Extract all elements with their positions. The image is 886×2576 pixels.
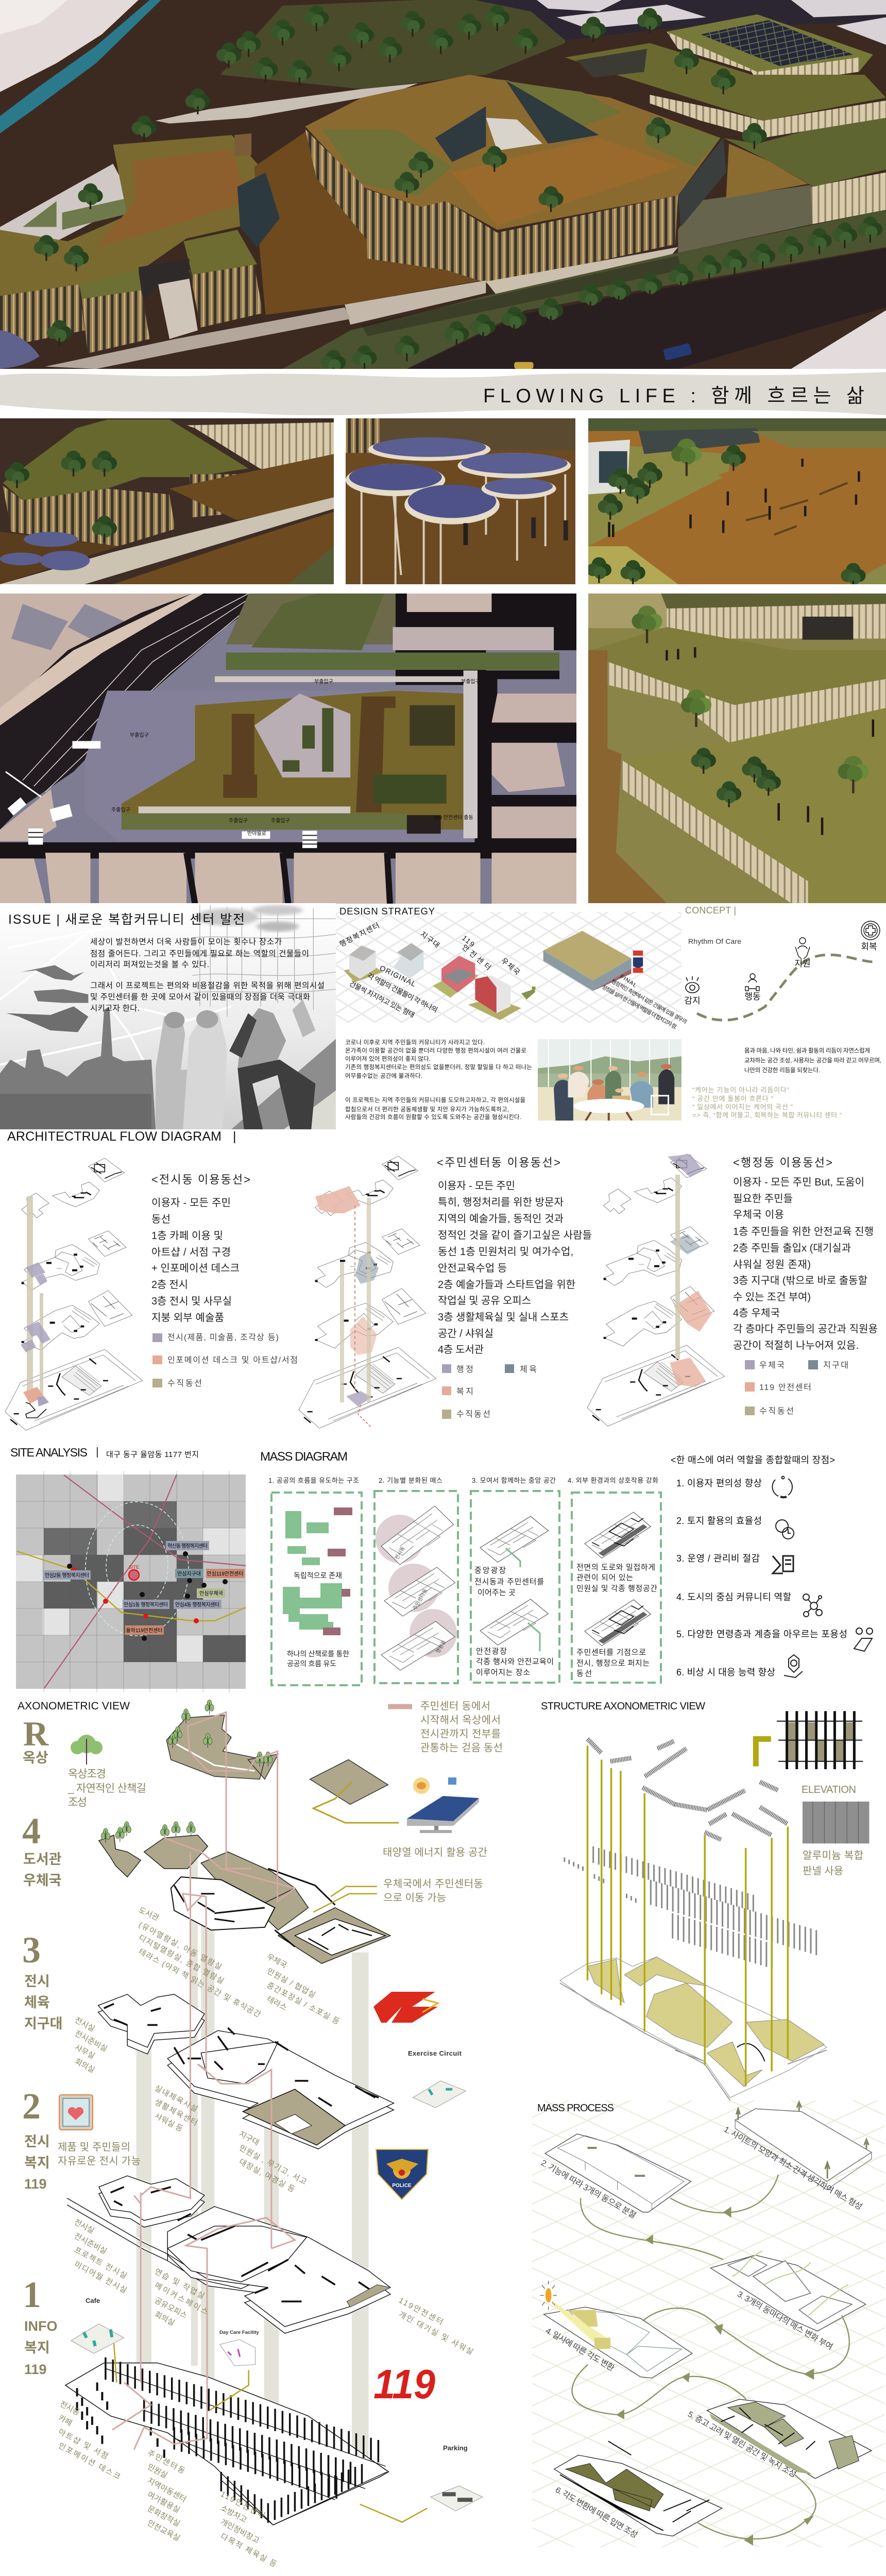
level labels: 119 <box>24 2362 47 2377</box>
strategy paragraphs <box>345 1039 532 1121</box>
concept quotes: “ 공간 안에 돌봄이 흐른다 ” <box>692 1095 773 1103</box>
flow 3 legend: 지구대 <box>823 1361 848 1370</box>
mass 4: environment: 관련이 되어 있는 <box>576 1573 633 1582</box>
walkway legend: 주민센터 동에서 <box>420 1700 490 1712</box>
rotated programme labels: 민원실 <box>146 2463 169 2480</box>
concept quotes: “ 일상에서 이어지는 케어의 곡선 ” <box>692 1103 793 1111</box>
level labels: 우체국 <box>23 1873 62 1888</box>
rotated programme labels: 도서관 <box>137 1906 160 1923</box>
panel: flow 2 residents centre: <주민센터동 이용동선> <box>437 1156 560 1169</box>
level labels: 1 <box>23 2274 41 2315</box>
icon: recovery 회복: 회복 <box>861 942 877 952</box>
panel: merits list: 2. 토지 활용의 효율성 <box>676 1516 762 1526</box>
strategy labels rotated: 행정적인 측면에서 같은 건물에 있을 경우의 <box>610 978 688 1025</box>
hero render: aerial view of the green-roof community centre <box>0 0 886 369</box>
facility labels: Cafe <box>86 2297 100 2304</box>
site map: 안심2동 행정복지센터 <box>45 1572 89 1579</box>
rotated programme labels: 주민센터동 <box>146 2449 186 2476</box>
site analysis heading: SITE ANALYSIS <box>10 1446 88 1459</box>
issue paragraph: 세상이 발전하면서 더욱 사람들이 모이는 횟수나 장소가 <box>90 937 282 946</box>
floor plan stack 2 <box>299 1156 436 1428</box>
panel: design strategy <box>336 906 688 1121</box>
strategy paragraphs: 이 프로젝트는 지역 주민들의 커뮤니티를 도모하고자하고, 각 편의시설을 <box>345 1096 525 1104</box>
strategy labels rotated: ORIGINAL <box>379 963 417 988</box>
panel: mass process <box>532 2100 885 2547</box>
site map: 안심1동 행정복지센터 <box>124 1602 168 1608</box>
photo: roof garden and people <box>588 594 886 903</box>
concept text: 나만의 건강한 리듬을 되찾는다. <box>744 1067 820 1074</box>
structure drawing <box>559 1711 870 2100</box>
level labels: 전시 <box>24 2134 50 2149</box>
title band with hand-torn wave <box>0 369 886 418</box>
site map: 안심우체국 <box>199 1590 223 1597</box>
rotated programme labels: 회의실 <box>153 2310 176 2328</box>
panel: structure axonometric: STRUCTURE AXONOMETRIC VIEW <box>541 1701 705 1712</box>
flow 3 text: 필요한 주민들 <box>733 1193 793 1205</box>
flow 3 text: 2층 주민들 출입x (대기실과 <box>733 1242 851 1254</box>
level labels: 도서관 <box>23 1852 62 1867</box>
elevation material note: 판넬 사용 <box>803 1865 843 1877</box>
elevation material note: ELEVATION <box>802 1784 856 1795</box>
flow 2 legend: 체육 <box>520 1365 537 1374</box>
concept quotes: “케어는 기능이 아니라 리듬이다” <box>692 1086 789 1094</box>
flow 1 text: 이용자 - 모든 주민 <box>151 1197 231 1209</box>
rotated programme labels: 우체국 <box>265 1953 288 1970</box>
rooftop annotation: _ 자연적인 산책길 <box>67 1783 146 1794</box>
site plan labels: 주출입구 <box>111 806 130 813</box>
facility labels: Parking <box>443 2444 468 2452</box>
mass 4: environment: 동선 <box>576 1669 592 1678</box>
icon: solar panel <box>407 1777 479 1833</box>
flow 2 legend <box>442 1364 537 1419</box>
mass 2: functional masses: 주민센터동 <box>412 1588 429 1612</box>
level labels: 옥상 <box>23 1750 48 1766</box>
flow 2 text <box>438 1180 592 1355</box>
strategy paragraphs: 사람들의 건강의 흐름이 원활할 수 있도록 도와주는 공간을 형성시킨다. <box>345 1113 521 1121</box>
annotation: solar and post office <box>58 1846 487 2167</box>
site map: 안심119안전센터 <box>207 1571 244 1577</box>
rotated programme labels: 개인 대기실 및 샤워실 <box>397 2310 474 2357</box>
concept text: 교차하는 공간 조성, 사용자는 공간을 따라 걷고 머무르며, <box>744 1057 881 1064</box>
flow 1 text: 동선 <box>151 1213 171 1225</box>
rotated programme labels: 지구대 <box>237 2130 261 2147</box>
strategy labels rotated: 장점을 살려 한 건물에 역할을 더 합치고자 함. <box>601 984 678 1031</box>
flow 2 text: 공간 / 샤워실 <box>438 1328 493 1340</box>
strategy paragraphs: 코로나 이후로 지역 주민들의 커뮤니티가 사라지고 있다. <box>345 1039 485 1046</box>
panel: mass diagram: 1. 공공의 흐름을 유도하는 구조 <box>268 1477 359 1484</box>
rotated programme labels: 연습 및 작업실 <box>153 2267 206 2301</box>
panel: merits list: 1. 이용자 편의성 향상 <box>676 1478 762 1488</box>
panel: site analysis <box>10 1446 246 1692</box>
mass 4: environment: 전면의 도로와 밀접하게 <box>576 1563 655 1572</box>
heading: architectural flow diagram: ARCHITECTRUAL FLOW DIAGRAM <box>7 1129 222 1144</box>
flow 3 text <box>733 1176 878 1351</box>
level labels: 4 <box>22 1810 41 1852</box>
flow 3 legend: 우체국 <box>759 1361 785 1370</box>
rooftop annotation <box>67 1768 146 1808</box>
annotation: solar and post office: 우체국에서 주민센터동 <box>383 1878 483 1890</box>
issue paragraph: 및 주민센터를 한 곳에 모아서 같이 있을때의 장점을 더욱 극대화 <box>90 992 310 1002</box>
site plan labels: 부출입구 <box>130 732 149 738</box>
walkway legend: 전시관까지 전부를 <box>420 1728 501 1740</box>
design strategy heading: DESIGN STRATEGY <box>339 906 435 917</box>
panel: merits list: 3. 운영 / 관리비 절감 <box>676 1553 760 1564</box>
level labels <box>22 1714 63 2377</box>
rotated programme labels: 전시실 <box>73 2016 96 2033</box>
flow 1 legend: 전시(제품, 미술품, 조각상 등) <box>167 1333 279 1342</box>
issue paragraph <box>90 937 325 1013</box>
strategy labels rotated <box>338 921 688 1031</box>
mass 3: central space: 전시동과 주민센터를 <box>474 1578 544 1586</box>
issue heading: ISSUE | 새로운 복합커뮤니티 센터 발전 <box>8 912 245 927</box>
level labels: 전시 <box>24 1974 50 1989</box>
level labels: 복지 <box>24 2340 50 2355</box>
icon: eye 감지 <box>684 976 701 1006</box>
icon: action 행동 <box>744 974 761 1002</box>
rotated programme labels: 디지털열람실, 종합 열람실 <box>137 1934 225 1986</box>
mass process captions <box>539 2125 864 2540</box>
mass 3: central space <box>474 1516 554 1677</box>
panel: mass diagram: 2. 기능별 분화된 매스 <box>379 1477 442 1484</box>
concept quotes <box>692 1086 842 1119</box>
site map: 혁신동 행정복지센터 <box>167 1543 208 1549</box>
flow 3 text: 1층 주민들을 위한 안전교육 진행 <box>733 1226 874 1238</box>
site map: 율하119안전센터 <box>126 1627 163 1634</box>
rotated programme labels: 전시준비실 <box>73 2232 108 2256</box>
flow 1 text: + 인포메이션 데스크 <box>151 1262 240 1274</box>
mass 2: functional masses: 행정동 <box>435 1639 447 1655</box>
mass 3: central space: 이어주는 곳 <box>478 1588 516 1597</box>
issue paragraph: 그래서 이 프로젝트는 편의와 비용절감을 위한 목적을 위해 편의시설 <box>90 981 325 990</box>
rotated programme labels: 민원실 / 협업실 <box>265 1967 317 1999</box>
panel: structure axonometric <box>541 1701 869 2100</box>
mass 4: environment <box>576 1512 657 1678</box>
walkway legend: 시작해서 옥상에서 <box>420 1714 501 1726</box>
strategy paragraphs: 온가족이 이용할 공간이 없을 뿐더러 다양한 행정 편의시설이 여러 건물로 <box>345 1047 526 1054</box>
flow 2 text: 4층 도서관 <box>438 1344 484 1355</box>
rotated programme labels: 119안전센터 <box>219 2490 266 2520</box>
rotated programme labels: 샤워실 등 <box>153 2112 184 2133</box>
mass 3: central space: 안전광장 <box>476 1647 507 1656</box>
rotated programme labels: 인포메이션 데스크 <box>57 2442 122 2481</box>
strategy labels rotated: 각 역할의 건물들이 각 하나의 <box>366 972 439 1014</box>
flow 2 text: 이용자 - 모든 주민 <box>438 1180 515 1192</box>
rotated programme labels: 메이커스페이스 <box>153 2281 210 2317</box>
mass process steps <box>540 2100 873 2546</box>
flow 3 text: 이용자 - 모든 주민 But, 도움이 <box>733 1176 864 1188</box>
flow 1 text: 1층 카페 이용 및 <box>151 1230 223 1242</box>
photo: building bridge perspective <box>0 418 334 584</box>
flow 2 legend: 행정 <box>456 1365 473 1374</box>
panel: merits list <box>671 1455 873 1677</box>
concept quotes: => 즉, “함께 머물고, 회복하는 복합 커뮤니티 센터 ” <box>692 1111 842 1119</box>
site plan labels <box>78 678 480 837</box>
flow 3 text: 공간이 적절히 나누어져 있음. <box>733 1340 859 1351</box>
panel: merits list: 6. 비상 시 대응 능력 향상 <box>676 1667 775 1677</box>
strategy paragraphs: 합침으로서 더 편리한 공동체생활 및 치안 유지가 가능하도록하고, <box>345 1106 509 1113</box>
mass process captions: 5. 층고 고려 및 열린 공간 및 녹지 조성 <box>686 2410 798 2479</box>
mass 1: separate blocks: 공공의 흐름 유도 <box>287 1659 336 1668</box>
flow 3 text: 샤워실 정원 존재) <box>733 1259 811 1270</box>
rotated programme labels: 회의실 <box>73 2057 96 2075</box>
panel: merits list: 5. 다양한 연령층과 계층을 아우르는 포용성 <box>676 1629 847 1639</box>
panel: mass process: MASS PROCESS <box>537 2103 614 2114</box>
logo: police badge <box>376 2149 428 2199</box>
site plan with road labels <box>0 594 576 904</box>
facility labels: Day Care Facility <box>219 2330 259 2335</box>
site plan labels: 범안로 <box>78 731 93 737</box>
level labels: INFO <box>24 2318 58 2334</box>
concept text <box>744 1047 881 1074</box>
rotated programme labels: 프로젝트 전시실 <box>73 2246 128 2281</box>
flow 2 text: 3층 생활체육실 및 실내 스포츠 <box>438 1311 569 1323</box>
mass 1: separate blocks <box>283 1507 352 1668</box>
flow 2 text: 안전교육수업 등 <box>438 1262 507 1274</box>
rotated programme labels: 안전교육실 <box>146 2519 181 2543</box>
site plan labels: 부출입구 <box>314 678 333 685</box>
strategy labels rotated: 지구대 <box>419 930 441 950</box>
isometric buildings and final mass <box>344 930 643 1020</box>
level labels: 복지 <box>24 2155 50 2171</box>
site map: 안심4동 행정복지센터 <box>175 1602 219 1608</box>
annotation: solar and post office: 으로 이동 가능 <box>383 1892 446 1904</box>
level labels: 3 <box>22 1929 41 1971</box>
panel: mass diagram: 4. 외부 환경과의 상호작용 강화 <box>568 1477 658 1484</box>
site analysis heading: 대구 동구 율암동 1177 번지 <box>106 1450 199 1459</box>
strategy labels rotated: 우체국 <box>500 956 522 976</box>
rotated programme labels: 중간포장실 / 소포실 등 <box>265 1981 341 2026</box>
rotated programme labels: 다목적 체육실 등 <box>219 2532 278 2569</box>
mass 4: environment: 전시, 행정으로 퍼지는 <box>576 1659 650 1668</box>
panel: issue <box>0 903 336 1129</box>
annotation: solar and post office: 태양열 에너지 활용 공간 <box>383 1846 487 1858</box>
concept heading: CONCEPT | <box>685 905 736 916</box>
site plan labels: 주출입구 <box>229 817 248 824</box>
flow 2 text: 2층 예술가들과 스타트업을 위한 <box>438 1279 575 1291</box>
panel: concept: Rhythm Of Care <box>688 937 741 945</box>
icon: action 행동: 행동 <box>744 992 761 1002</box>
elevation material note: 알루미늄 복합 <box>803 1850 863 1861</box>
strategy labels rotated: 안전센터 <box>461 943 492 972</box>
heading: architectural flow diagram: | <box>233 1129 236 1144</box>
panel: axonometric view: AXONOMETRIC VIEW <box>18 1700 130 1712</box>
panel: flow 3 administration <box>587 1154 878 1426</box>
site plan labels: 반야월로 <box>247 831 266 837</box>
illustration: people around a table <box>538 1039 681 1121</box>
mass 2: functional masses <box>376 1506 457 1670</box>
photo: blue pavilion canopies <box>346 418 575 584</box>
icon: support 지원: 지원 <box>794 959 811 969</box>
mass process captions: 3. 3개의 동마다의 매스 변화 부여 <box>736 2290 834 2352</box>
icon: exhibition frame <box>59 2095 93 2130</box>
mass process captions: 2. 기능에 따라 3개의 동으로 분절 <box>539 2158 638 2220</box>
panel: flow 3 administration: <행정동 이용동선> <box>733 1156 832 1169</box>
panel: flow 2 residents centre <box>299 1156 592 1428</box>
icon: recovery 회복 <box>861 921 880 952</box>
panel: merits list: 4. 도시의 중심 커뮤니티 역할 <box>676 1592 791 1602</box>
strategy paragraphs: 이루어져 있어 편의성이 좋지 않다. <box>345 1056 431 1062</box>
rotated programme labels: 개인정비창고 <box>219 2518 261 2545</box>
facility labels <box>86 2049 468 2452</box>
mass 2: functional masses: 전시동 <box>394 1546 406 1561</box>
logo: police badge: POLICE <box>392 2183 412 2189</box>
mass 4: environment: 민원실 및 각종 행정공간 <box>576 1584 657 1593</box>
mass process captions: 4. 일사에 따른 각도 변환 <box>544 2326 616 2373</box>
strategy paragraphs: 머무를수없는 공간에 불과하다. <box>345 1072 422 1079</box>
annotation: solar and post office: 제품 및 주민들의 <box>58 2141 130 2153</box>
mass 3: central space: 중앙광장 <box>474 1566 506 1575</box>
rotated programme labels: 여가활용실 <box>146 2490 181 2515</box>
concept text: 몸과 마음, 나와 타인, 쉼과 활동의 리듬이 자연스럽게 <box>744 1047 870 1054</box>
panel: mass diagram <box>260 1450 661 1685</box>
site map: SITE <box>129 1565 139 1570</box>
icon: rooftop tree <box>71 1735 103 1765</box>
mass 1: separate blocks: 독립적으로 존재 <box>294 1571 342 1580</box>
walkway legend <box>420 1700 503 1754</box>
panel: mass diagram: MASS DIAGRAM <box>260 1450 348 1464</box>
rotated programme labels: 문화창작실 <box>146 2504 181 2529</box>
walkway legend: 관통하는 걷음 동선 <box>420 1742 503 1754</box>
facility labels: Exercise Circuit <box>408 2049 462 2057</box>
rotated programme labels: (유아열람실, 아동 열람실 <box>137 1921 223 1972</box>
icon: support 지원 <box>794 938 811 969</box>
title band with hand-torn wave: FLOWING LIFE : 함께 흐르는 삶 <box>483 385 864 407</box>
floor plan stack 1 <box>5 1158 143 1430</box>
flow 1 text: 아트샵 / 서점 구경 <box>151 1246 231 1258</box>
site map <box>16 1471 246 1692</box>
rotated programme labels: 공유오피스 <box>153 2296 189 2320</box>
flow 2 text: 정적인 것을 같이 즐기고싶은 사람들 <box>438 1229 592 1241</box>
strategy paragraphs: 기존의 행정복지센터로는 편의성도 없을뿐더러, 정말 할일을 다 하고 떠나는 <box>345 1063 532 1071</box>
flow 3 text: 수 있는 조건 부여) <box>733 1291 811 1303</box>
flow 3 text: 4층 우체국 <box>733 1307 780 1319</box>
panel: concept <box>684 905 881 1119</box>
flow 3 text: 3층 지구대 (밖으로 바로 출동할 <box>733 1275 867 1286</box>
panel: flow 1 exhibition: <전시동 이용동선> <box>151 1173 250 1186</box>
rotated programme labels: 119안전센터 <box>397 2296 445 2327</box>
flow 1 text <box>151 1197 240 1324</box>
site plan labels: 119 안전센터 출동 <box>434 815 473 821</box>
issue paragraph: 시키고자 한다. <box>90 1004 140 1013</box>
rotated programme labels: 전시준비실 <box>73 2029 109 2054</box>
rooftop annotation: 옥상조경 <box>68 1768 106 1780</box>
rotated programme labels: 민원실 , 무기고, 서고 <box>237 2144 308 2187</box>
flow 2 text: 작업실 및 공유 오피스 <box>438 1295 531 1307</box>
photo: timber plaza with lawn and people <box>588 418 886 584</box>
rotated programme labels: 생활체육센터 <box>153 2098 199 2128</box>
rotated programme labels: 테라스 <box>265 1995 288 2012</box>
mass process captions: 6. 각도 변환에 따른 입면 조성 <box>554 2485 639 2540</box>
flow 1 text: 2층 전시 <box>151 1279 188 1291</box>
flow 2 legend: 수직동선 <box>456 1410 490 1419</box>
mass 3: central space: 각종 행사와 안전교육이 <box>476 1657 554 1666</box>
strategy labels rotated: 119 <box>461 934 476 948</box>
flow 2 text: 지역의 예술가들, 동적인 것과 <box>438 1213 564 1225</box>
flow 1 text: 지붕 외부 예술품 <box>151 1312 224 1324</box>
panel: flow 1 exhibition <box>5 1158 298 1430</box>
level labels: 119 <box>24 2176 47 2192</box>
logo: 119: 119 <box>373 2361 435 2407</box>
dashed rhythm curve <box>697 955 873 1020</box>
floor plan stack 3 <box>587 1154 725 1426</box>
strategy labels rotated: 건물씩 차지하고 있는 형태 <box>348 979 416 1019</box>
strategy labels rotated: 행정복지센터 <box>338 921 381 948</box>
site plan labels: 주출입구 <box>271 817 290 824</box>
flow 3 text: 우체국 이용 <box>733 1209 784 1221</box>
flow 2 text: 특히, 행정처리를 위한 방문자 <box>438 1196 564 1208</box>
flow 3 legend <box>745 1360 848 1416</box>
level labels: 2 <box>22 2086 41 2127</box>
rotated programme labels: 카페 <box>57 2414 73 2428</box>
level labels: 지구대 <box>24 2016 63 2031</box>
flow 1 legend <box>152 1333 298 1388</box>
rooftop annotation: 조성 <box>68 1797 87 1808</box>
flow 2 text: 동선 1층 민원처리 및 여가수업, <box>438 1246 573 1258</box>
logo: post office <box>373 1992 438 2023</box>
elevation material note <box>802 1784 863 1877</box>
issue paragraph: 점점 줄어든다. 그리고 주민들에게 필요로 하는 역할의 건물들이 <box>90 949 309 958</box>
rotated programme labels: 전시동 <box>58 2400 81 2417</box>
icon: eye 감지: 감지 <box>684 996 701 1006</box>
rotated programme labels: 지역아동센터 <box>146 2477 188 2504</box>
mass 3: central space: 이루어지는 장소 <box>476 1668 530 1677</box>
icon: sun <box>413 1777 430 1794</box>
level labels: 체육 <box>24 1995 50 2010</box>
site plan labels: 부출입구 <box>461 678 480 685</box>
flow 3 text: 각 층마다 주민들의 공간과 직원용 <box>733 1323 878 1335</box>
annotation: solar and post office: 자유로운 전시 가능 <box>58 2155 141 2167</box>
rotated programme labels: 소방차고 <box>219 2504 248 2524</box>
panel: axonometric view <box>18 1700 503 2569</box>
panel: mass diagram: 3. 모여서 함께하는 중앙 공간 <box>472 1477 556 1484</box>
rotated programme labels: 사무실 <box>73 2043 96 2061</box>
rotated programme labels <box>57 1906 474 2569</box>
level labels: R <box>23 1714 49 1753</box>
flow 1 legend: 수직동선 <box>167 1379 202 1388</box>
flow 1 legend: 인포메이션 데스크 및 아트샵/서점 <box>167 1355 298 1365</box>
rotated programme labels: 아트샵 및 서점 <box>57 2428 110 2461</box>
flow 3 legend: 수직동선 <box>759 1406 794 1416</box>
mass 4: environment: 주민센터를 기점으로 <box>576 1648 646 1657</box>
rotated programme labels: 테라스 (야외 책 읽는 공간 및 휴식공간 <box>137 1947 262 2019</box>
rotated programme labels: 대장실, 여경실 등 <box>237 2158 296 2194</box>
panel: merits list: <한 매스에 여러 역할을 종합할때의 장점> <box>671 1455 835 1465</box>
flow 3 legend: 119 안전센터 <box>759 1383 811 1392</box>
site analysis heading <box>10 1446 199 1459</box>
site map: 안심지구대 <box>177 1571 201 1577</box>
rotated programme labels: 전시실 <box>73 2218 96 2235</box>
dashed frames <box>271 1491 661 1685</box>
exploded axonometric drawing <box>65 1700 483 2526</box>
flow 2 legend: 복지 <box>456 1387 473 1396</box>
strategy labels rotated: FINAL <box>619 973 638 989</box>
rotated programme labels: 실내체육시설 <box>153 2084 199 2114</box>
flow 1 text: 3층 전시 및 사무실 <box>151 1295 232 1307</box>
merit icons <box>772 1477 873 1677</box>
issue paragraph: 이리저리 퍼져있는것을 볼 수 있다. <box>90 960 209 969</box>
mass process captions: 1. 사이트의 모양과 최소 간격 생각하여 매스 형성 <box>722 2125 864 2212</box>
mass 1: separate blocks: 하나의 산책로를 통한 <box>287 1650 349 1658</box>
rotated programme labels: 미디어월 전시실 <box>73 2260 128 2295</box>
